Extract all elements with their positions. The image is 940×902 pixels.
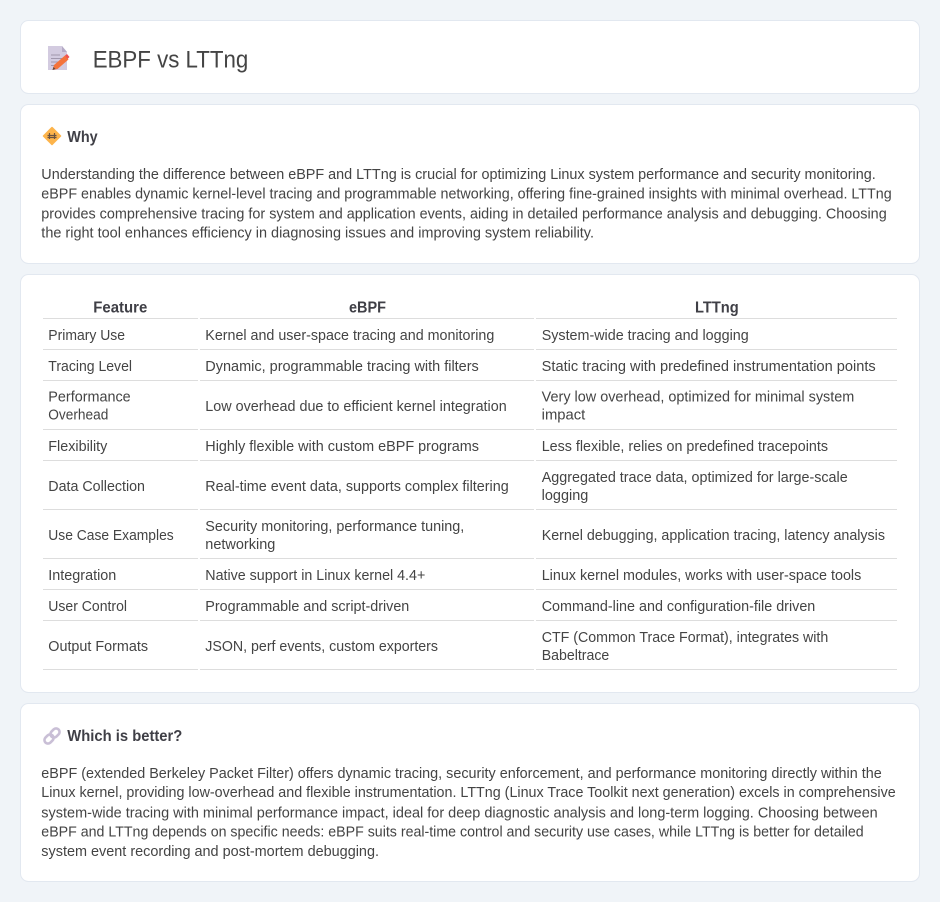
panel: comparison table xyxy=(20,274,920,692)
text block: why paragraph xyxy=(41,167,892,241)
table row: flexibility: Flexibility xyxy=(48,439,108,455)
icon: document with pencil xyxy=(48,46,70,70)
text block: which is better paragraph: system event recording and post-mortem debugging. xyxy=(41,844,379,860)
text block: why paragraph: eBPF enables dynamic kernel-level tracing and programmable networking, offering fine-grained insights with minimal overhead. LTTng xyxy=(41,186,892,202)
table row: performance overhead: impact xyxy=(542,408,585,424)
table row: tracing level xyxy=(43,359,897,381)
panel: title header xyxy=(20,20,920,94)
table row: primary use: System-wide tracing and logging xyxy=(542,328,749,344)
table row: output formats: JSON, perf events, custom exporters xyxy=(205,639,438,655)
icon: orange diamond sign xyxy=(44,128,60,144)
text block: which is better paragraph: eBPF and LTTng depends on specific needs: eBPF suits real-time control and security use cases, while LTTng is better for detailed xyxy=(41,824,864,840)
text block: which is better paragraph xyxy=(41,766,896,860)
text block: which is better paragraph: Linux kernel, providing low-overhead and flexible instrumentation. LTTng (Linux Trace Toolkit next generation) excels in comprehensive xyxy=(41,785,896,801)
panel: which is better xyxy=(20,704,920,882)
table row: primary use: Kernel and user-space tracing and monitoring xyxy=(205,328,494,344)
panel: why xyxy=(20,104,920,264)
text block: which is better paragraph: system-wide tracing with minimal performance impact, ideal for deep diagnostic analysis and long-term logging. Choosing between xyxy=(41,805,878,821)
table row: primary use xyxy=(43,328,897,350)
table row: use case examples: Kernel debugging, application tracing, latency analysis xyxy=(542,528,885,544)
table row: data collection: Aggregated trace data, optimized for large-scale xyxy=(542,470,848,486)
table row: flexibility: Less flexible, relies on predefined tracepoints xyxy=(542,439,828,455)
table row: data collection: Real-time event data, supports complex filtering xyxy=(205,479,509,495)
table row: use case examples xyxy=(43,519,897,559)
table row: integration: Linux kernel modules, works with user-space tools xyxy=(542,568,861,584)
table row: performance overhead: Overhead xyxy=(48,408,108,424)
table row: user control: User Control xyxy=(48,599,127,615)
table row: user control: Command-line and configuration-file driven xyxy=(542,599,815,615)
table row: output formats: Output Formats xyxy=(48,639,148,655)
table row: data collection: Data Collection xyxy=(48,479,145,495)
table row: user control: Programmable and script-driven xyxy=(205,599,409,615)
table row: user control xyxy=(43,599,897,621)
table row: performance overhead: Performance xyxy=(48,390,131,406)
table header row: LTTng xyxy=(695,299,739,316)
text block: which is better paragraph: eBPF (extended Berkeley Packet Filter) offers dynamic tracing, security enforcement, and performance monitoring directly within the xyxy=(41,766,882,782)
table row: data collection xyxy=(43,470,897,510)
table row: performance overhead xyxy=(43,390,897,430)
table row: data collection: logging xyxy=(542,488,588,504)
heading: which is better: Which is better? xyxy=(67,728,182,745)
table row: primary use: Primary Use xyxy=(48,328,125,344)
table row: performance overhead: Very low overhead, optimized for minimal system xyxy=(542,390,854,406)
title: EBPF vs LTTng xyxy=(93,46,248,73)
text block: why paragraph: provides comprehensive tracing for system and application events, aiding in detailed performance analysis and debugging. Choosing xyxy=(41,206,887,222)
icon: chain link xyxy=(43,727,61,745)
table row: integration: Native support in Linux kernel 4.4+ xyxy=(205,568,425,584)
table row: output formats: CTF (Common Trace Format), integrates with xyxy=(542,630,828,646)
text block: why paragraph: the right tool enhances efficiency in diagnosing issues and improving system reliability. xyxy=(41,225,594,241)
table row: use case examples: Security monitoring, performance tuning, xyxy=(205,519,464,535)
table row: use case examples: Use Case Examples xyxy=(48,528,174,544)
table row: tracing level: Static tracing with predefined instrumentation points xyxy=(542,359,876,375)
table row: tracing level: Dynamic, programmable tracing with filters xyxy=(205,359,479,375)
table row: performance overhead: Low overhead due to efficient kernel integration xyxy=(205,399,507,415)
text block: why paragraph: Understanding the difference between eBPF and LTTng is crucial for optimizing Linux system performance and security monitoring. xyxy=(41,167,876,183)
table row: integration: Integration xyxy=(48,568,116,584)
table row: flexibility: Highly flexible with custom eBPF programs xyxy=(205,439,479,455)
table row: tracing level: Tracing Level xyxy=(48,359,132,375)
table row: use case examples: networking xyxy=(205,537,275,553)
table row: flexibility xyxy=(43,439,897,461)
table row: integration xyxy=(43,568,897,590)
table row: output formats xyxy=(43,630,897,670)
table header row xyxy=(43,299,897,319)
table header row: eBPF xyxy=(349,299,386,316)
table row: output formats: Babeltrace xyxy=(542,648,609,664)
heading: why: Why xyxy=(67,129,98,146)
table header row: Feature xyxy=(93,299,147,316)
